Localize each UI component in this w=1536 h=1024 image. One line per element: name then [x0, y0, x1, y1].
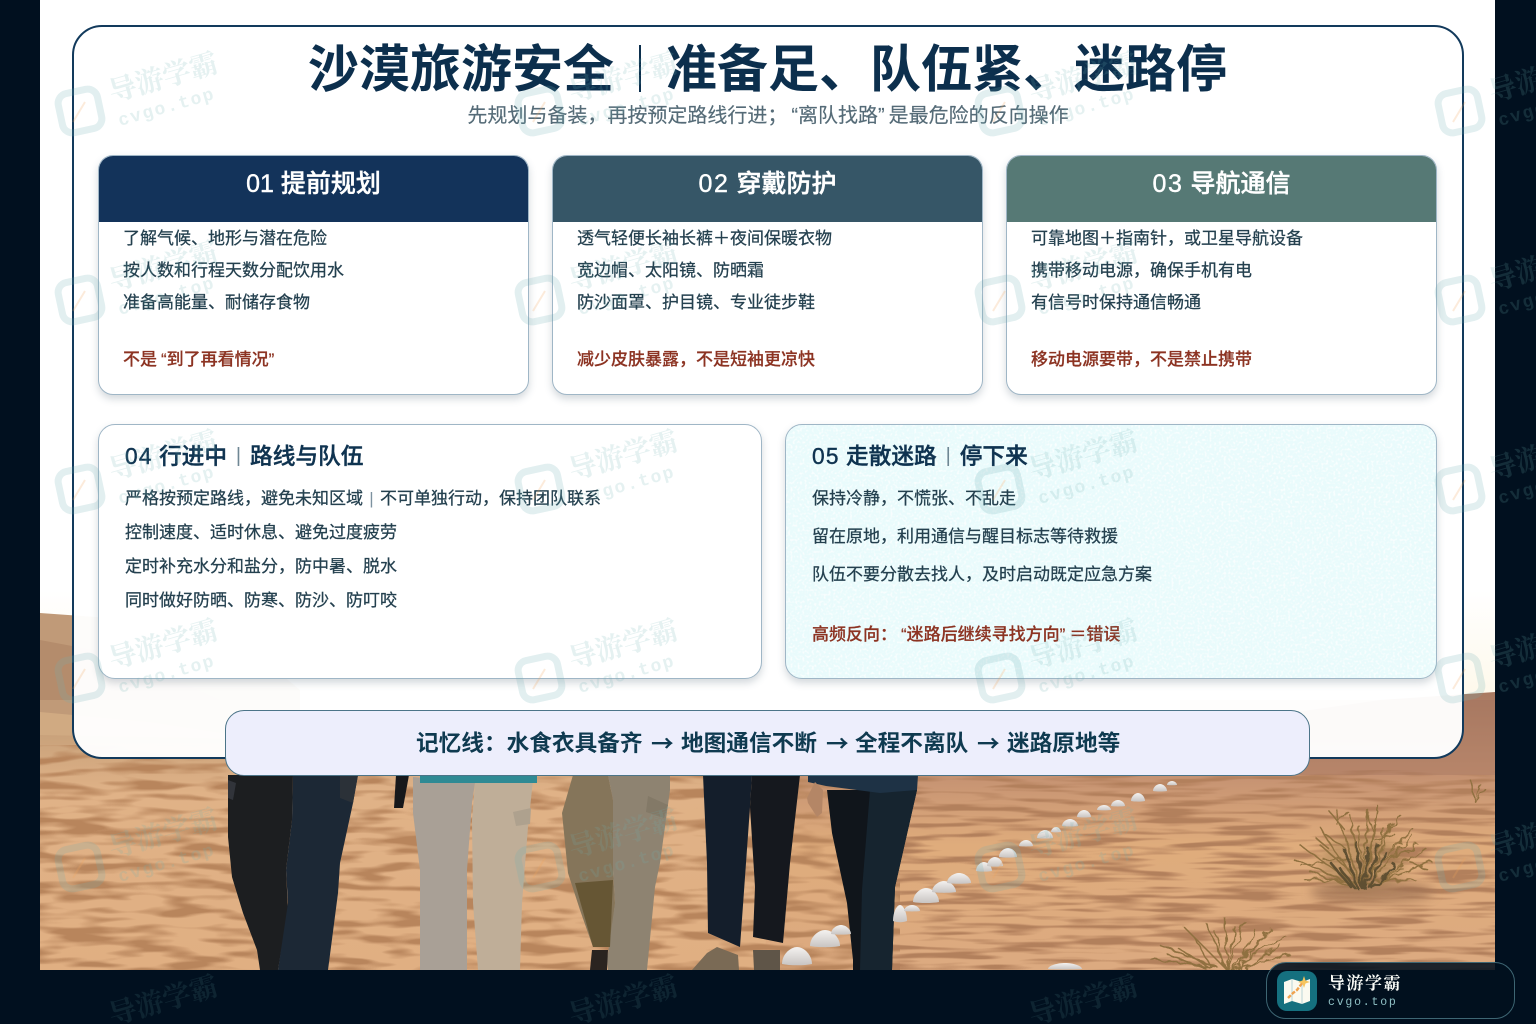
heading: 03 [1007, 156, 1436, 222]
memory line banner: → [826, 726, 849, 759]
item list: 05: 留在原地，利用通信与醒目标志等待救援 [812, 527, 1118, 546]
item list: 02: 减少皮肤暴露，不是短袖更凉快 [577, 350, 815, 369]
item list: 03: 携带移动电源，确保手机有电 [1031, 261, 1252, 280]
person 4 legs [692, 775, 800, 970]
watermark grid: 导游学霸 [103, 230, 222, 300]
item list: 03: 移动电源要带，不是禁止携带 [1031, 350, 1252, 369]
person 1 legs [228, 775, 358, 970]
watermark grid: 导游学霸 [103, 419, 222, 489]
item list: 04: 严格按预定路线，避免未知区域 不可单独行动，保持团队联系 [125, 489, 601, 508]
heading: 03: 03 导航通信 [1153, 170, 1290, 198]
heading: 01 [99, 156, 528, 222]
watermark grid: 导游学霸 [1023, 419, 1142, 489]
watermark grid: cvgo.top [576, 85, 678, 132]
watermark grid: 导游学霸 [103, 41, 222, 111]
watermark grid: 导游学霸 [563, 41, 682, 111]
item list: 01 [123, 229, 344, 369]
panel: 03 navigation and communication [1006, 155, 1437, 395]
item list: 04: | [369, 489, 374, 508]
item list: 03: 有信号时保持通信畅通 [1031, 293, 1201, 312]
watermark grid: 导游学霸 [563, 797, 682, 867]
watermark grid: cvgo.top [576, 841, 678, 888]
heading: 04: | [236, 445, 241, 467]
item list: 02: 宽边帽、太阳镜、防晒霜 [577, 261, 764, 280]
title: 准备足、队伍紧、迷路停 [666, 41, 1227, 98]
item list: 05 [812, 489, 1152, 644]
memory line banner: 地图通信不断 [681, 730, 817, 756]
memory line banner: 全程不离队 [855, 730, 968, 756]
heading: 05: | [946, 445, 951, 467]
panel: 04 on the move [98, 424, 762, 679]
memory line banner: 记忆线：水食衣具备齐 [416, 730, 643, 756]
watermark grid: cvgo.top [576, 652, 678, 699]
item list: 02 [577, 229, 832, 369]
panel: 01 advance planning [98, 155, 529, 395]
main white panel [72, 25, 1464, 759]
icon: folded map [1277, 971, 1317, 1011]
watermark grid: cvgo.top [116, 652, 218, 699]
person 3 legs [562, 775, 670, 970]
brand name: 导游学霸 [1328, 969, 1402, 994]
watermark grid: cvgo.top [576, 463, 678, 510]
memory line banner: → [651, 726, 674, 759]
item list: 04 [125, 489, 601, 610]
heading: 04: 04 行进中 路线与队伍 [125, 443, 363, 469]
watermark grid: 导游学霸 [103, 797, 222, 867]
watermark grid: cvgo.top [116, 841, 218, 888]
watermark grid: 导游学霸 [103, 608, 222, 678]
item list: 05: 队伍不要分散去找人，及时启动既定应急方案 [812, 565, 1152, 584]
watermark grid: cvgo.top [1036, 463, 1138, 510]
watermark grid: 导游学霸 [563, 230, 682, 300]
watermark grid: cvgo.top [116, 274, 218, 321]
item list: 03 [1031, 229, 1303, 369]
watermark grid: 导游学霸 [1023, 797, 1142, 867]
item list: 04: 控制速度、适时休息、避免过度疲劳 [125, 523, 397, 542]
title [308, 41, 1227, 98]
item list: 01: 准备高能量、耐储存食物 [123, 293, 310, 312]
brand url: cvgo.top [1328, 996, 1398, 1009]
item list: 01: 了解气候、地形与潜在危险 [123, 229, 327, 248]
watermark grid: cvgo.top [1036, 841, 1138, 888]
memory line banner: 迷路原地等 [1007, 730, 1120, 756]
person 5 legs and jacket [807, 775, 918, 970]
heading: 02 [553, 156, 982, 222]
watermark grid: cvgo.top [1036, 652, 1138, 699]
watermark grid: 导游学霸 [1023, 608, 1142, 678]
item list: 02: 透气轻便长袖长裤＋夜间保暖衣物 [577, 229, 832, 248]
heading: 01: 01 提前规划 [246, 170, 381, 198]
dry shrubs [1150, 780, 1486, 968]
watermark grid: 导游学霸 [1023, 41, 1142, 111]
watermark grid: 导游学霸 [563, 419, 682, 489]
item list: 03: 可靠地图＋指南针，或卫星导航设备 [1031, 229, 1303, 248]
memory line banner: → [977, 726, 1000, 759]
memory line banner [225, 710, 1310, 776]
watermark grid: cvgo.top [1036, 85, 1138, 132]
item list: 05: 保持冷静，不慌张、不乱走 [812, 489, 1016, 508]
panel: 02 clothing protection [552, 155, 983, 395]
item list: 01: 不是“到了再看情况” [123, 350, 274, 369]
heading: 05: 05 走散迷路 停下来 [812, 443, 1028, 469]
watermark grid: cvgo.top [576, 274, 678, 321]
title: 沙漠旅游安全 [308, 41, 614, 98]
item list: 04: 同时做好防晒、防寒、防沙、防叮咬 [125, 591, 397, 610]
item list: 04: 定时补充水分和盐分，防中暑、脱水 [125, 557, 397, 576]
watermark grid: cvgo.top [1036, 274, 1138, 321]
item list: 05: 高频反向：“迷路后继续寻找方向”＝错误 [812, 625, 1120, 644]
item list: 02: 防沙面罩、护目镜、专业徒步鞋 [577, 293, 815, 312]
brand badge [1266, 962, 1515, 1019]
watermark grid: 导游学霸 [1023, 230, 1142, 300]
watermark grid: cvgo.top [116, 463, 218, 510]
person 2 legs [394, 775, 537, 970]
heading: 02: 02 穿戴防护 [699, 170, 836, 198]
subtitle: 先规划与备装，再按预定路线行进；“离队找路”是最危险的反向操作 [467, 105, 1069, 127]
item list: 01: 按人数和行程天数分配饮用水 [123, 261, 344, 280]
panel: 05 lost, stop [785, 424, 1437, 679]
watermark grid: cvgo.top [116, 85, 218, 132]
stone trail [782, 781, 1177, 969]
watermark grid: 导游学霸 [563, 608, 682, 678]
